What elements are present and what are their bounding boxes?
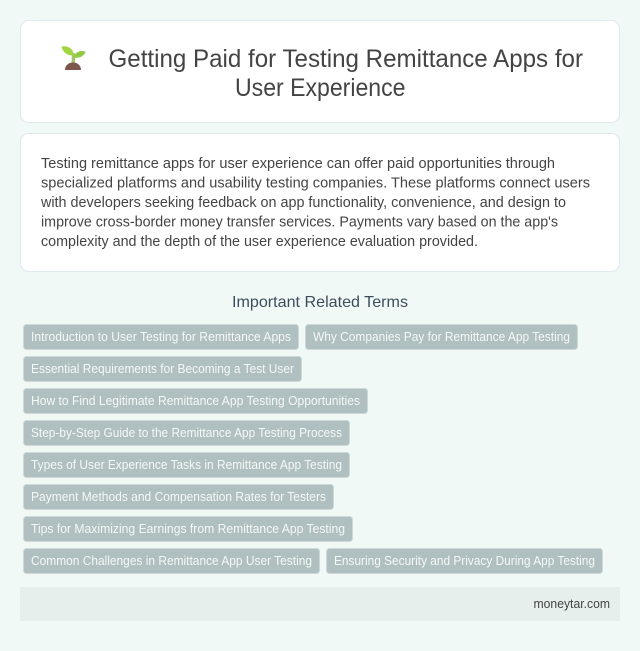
tag: task types: Types of User Experience Tasks in Remittance App Testing xyxy=(31,458,342,472)
text block: description: complexity and the depth of the user experience evaluation provided. xyxy=(41,234,478,250)
title: Getting Paid for Testing Remittance Apps for xyxy=(108,45,583,73)
text block: description: Testing remittance apps for user experience can offer paid opportunities through xyxy=(41,156,555,172)
tag: payment methods: Payment Methods and Compensation Rates for Testers xyxy=(31,490,326,504)
panel: title card xyxy=(20,20,620,122)
tag: security and privacy: Ensuring Security and Privacy During App Testing xyxy=(334,554,595,568)
tag: finding opportunities: How to Find Legitimate Remittance App Testing Opportunities xyxy=(31,394,360,408)
tag: finding opportunities xyxy=(24,388,368,414)
tag: common challenges: Common Challenges in Remittance App User Testing xyxy=(31,554,312,568)
tag list xyxy=(24,324,602,574)
panel: description card xyxy=(20,134,620,272)
title: User Experience xyxy=(235,74,406,102)
tag: maximizing earnings: Tips for Maximizing Earnings from Remittance App Testing xyxy=(31,522,345,536)
tag: step-by-step guide xyxy=(24,420,350,446)
tag: security and privacy xyxy=(326,548,602,574)
tag: task types xyxy=(24,452,350,478)
tag: why companies pay: Why Companies Pay for Remittance App Testing xyxy=(313,330,570,344)
title xyxy=(108,45,583,102)
tag: requirements: Essential Requirements for Becoming a Test User xyxy=(31,362,294,376)
tag: maximizing earnings xyxy=(24,516,352,542)
icon: seedling xyxy=(62,46,86,70)
text block: description xyxy=(40,156,590,250)
footer xyxy=(20,587,620,621)
tag: why companies pay xyxy=(306,324,578,350)
tag: payment methods xyxy=(24,484,334,510)
text block: description: with developers seeking feedback on app functionality, convenience, and design to xyxy=(40,195,566,211)
heading: important related terms: Important Related Terms xyxy=(232,294,408,311)
text block: description: improve cross-border money transfer services. Payments vary based on the app's xyxy=(41,214,558,230)
tag: requirements xyxy=(24,356,302,382)
tag: step-by-step guide: Step-by-Step Guide to the Remittance App Testing Process xyxy=(31,426,342,440)
tag: common challenges xyxy=(24,548,320,574)
tag: introduction: Introduction to User Testing for Remittance Apps xyxy=(31,330,291,344)
tag: introduction xyxy=(24,324,298,350)
text block: description: specialized platforms and usability testing companies. These platforms connect users xyxy=(41,176,590,192)
footer: site name: moneytar.com xyxy=(534,597,610,611)
